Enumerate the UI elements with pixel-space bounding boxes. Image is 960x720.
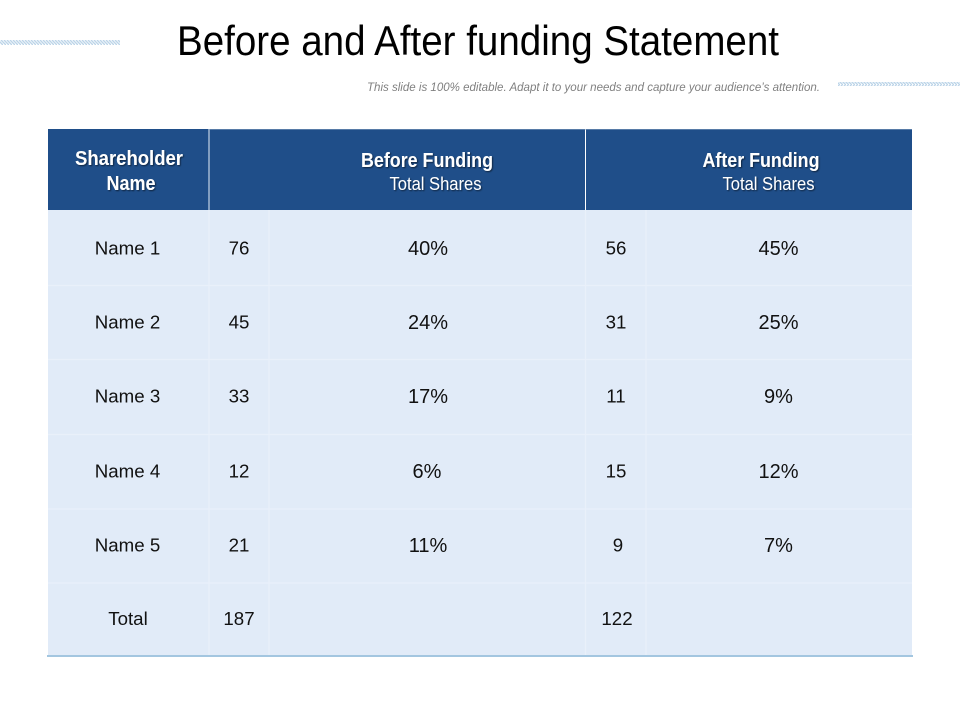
- header: shareholder name: [75, 148, 183, 195]
- subtitle: This slide is 100% editable. Adapt it to your needs and capture your audience’s attention.: [367, 82, 820, 94]
- header: before funding: Before Funding: [361, 150, 493, 172]
- row: Name 3: 17%: [408, 386, 448, 408]
- row: Name 2: 45: [229, 312, 249, 332]
- row: Name 2: 24%: [408, 312, 448, 334]
- row: Name 4: 12: [229, 460, 249, 482]
- row: Name 1: 40%: [408, 238, 448, 260]
- header: before funding: Total Shares: [390, 174, 482, 194]
- header: after funding: [702, 150, 820, 194]
- header: shareholder name: Shareholder: [75, 148, 183, 170]
- row: Name 3: [95, 386, 793, 408]
- row: Name 3: 33: [229, 386, 249, 406]
- table header band: [48, 129, 912, 210]
- row: Name 5: 21: [229, 534, 249, 556]
- row: Total: 187: [223, 608, 255, 629]
- row: Name 5: Name 5: [95, 534, 160, 556]
- row: Name 4: 12%: [758, 461, 799, 483]
- row: Name 3: Name 3: [95, 386, 160, 406]
- row: Total: Total: [108, 608, 148, 629]
- row: Name 1: Name 1: [95, 238, 160, 258]
- row: Name 4: [95, 460, 799, 483]
- row: Total: 122: [601, 608, 633, 629]
- row: Total: [108, 608, 633, 629]
- row: Name 1: 45%: [758, 238, 799, 260]
- row: Name 4: Name 4: [95, 460, 160, 482]
- row: Name 1: [95, 238, 799, 260]
- row: Name 2: 25%: [758, 312, 799, 334]
- row: Name 2: 31: [606, 312, 626, 332]
- row: Name 1: 56: [606, 238, 626, 258]
- decorative hatch: right: [838, 82, 960, 86]
- row: Name 5: 11%: [409, 535, 447, 557]
- header: after funding: Total Shares: [722, 174, 814, 194]
- row: Name 3: 11: [606, 386, 626, 406]
- header: before funding: [361, 150, 493, 194]
- table body: [47, 210, 913, 656]
- row: Name 3: 9%: [764, 386, 793, 408]
- row: Name 2: Name 2: [95, 312, 160, 332]
- decorative hatch: left: [0, 40, 120, 45]
- row: Name 1: 76: [229, 238, 249, 258]
- table: [47, 129, 913, 656]
- row: Name 2: [95, 312, 799, 334]
- row: Name 4: 6%: [413, 461, 442, 483]
- row: Name 4: 15: [606, 460, 626, 482]
- row: Name 5: 9: [613, 534, 623, 556]
- header: after funding: After Funding: [702, 150, 820, 172]
- row: Name 5: [95, 534, 793, 557]
- title: Before and After funding Statement: [177, 17, 779, 64]
- header: shareholder name: Name: [106, 173, 156, 195]
- row: Name 5: 7%: [764, 535, 793, 557]
